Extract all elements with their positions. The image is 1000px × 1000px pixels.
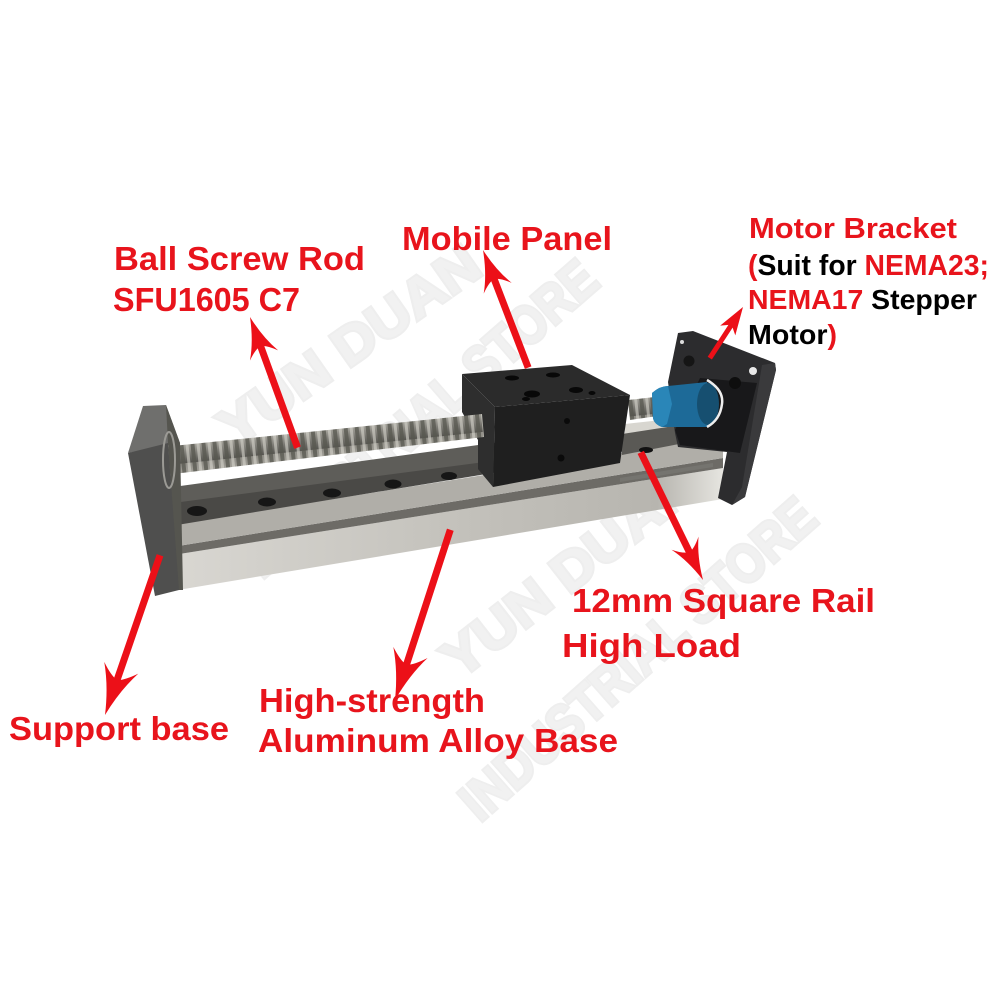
arrow: square rail	[627, 446, 716, 587]
label: ball screw rod: Ball Screw Rod	[114, 240, 365, 277]
label: motor bracket: Motor Bracket	[749, 213, 957, 245]
label: motor bracket: (Suit for NEMA23;	[748, 250, 989, 282]
watermark: store name lower: YUN DUAN	[430, 454, 708, 689]
arrow: support base	[88, 549, 177, 721]
left support base plate	[128, 405, 183, 596]
label: support base: Support base	[9, 710, 229, 747]
label: aluminum alloy base: Aluminum Alloy Base	[258, 722, 618, 759]
arrow: ball screw rod	[236, 312, 312, 453]
label: SFU1605 C7: SFU1605 C7	[113, 281, 300, 318]
mobile panel block	[462, 365, 630, 487]
aluminum alloy base	[170, 437, 723, 590]
motor bracket plate	[668, 331, 776, 505]
label: high load: High Load	[562, 627, 741, 664]
ball screw rod, support side	[163, 414, 484, 475]
linear module product	[128, 331, 776, 596]
square rail with holes	[173, 418, 713, 525]
ball screw rod, motor side	[628, 395, 672, 420]
arrow: aluminum base	[378, 524, 467, 706]
arrow: mobile panel	[469, 245, 542, 373]
blue coupling	[652, 380, 722, 427]
watermark: store name lower: INDUSTRIAL STORE	[448, 486, 828, 832]
arrow: motor bracket	[702, 302, 751, 363]
watermark: store name upper: YUN DUAN	[207, 234, 492, 458]
watermark: store name upper: INDUSTRIAL STORE	[231, 249, 609, 589]
label: mobile panel: Mobile Panel	[402, 220, 612, 257]
label: 12mm square rail: 12mm Square Rail	[572, 582, 875, 619]
label: motor bracket: NEMA17 Stepper	[748, 284, 977, 315]
label: motor bracket: Motor)	[748, 319, 837, 350]
label: motor bracket	[748, 213, 989, 350]
label: high-strength: High-strength	[259, 682, 485, 719]
